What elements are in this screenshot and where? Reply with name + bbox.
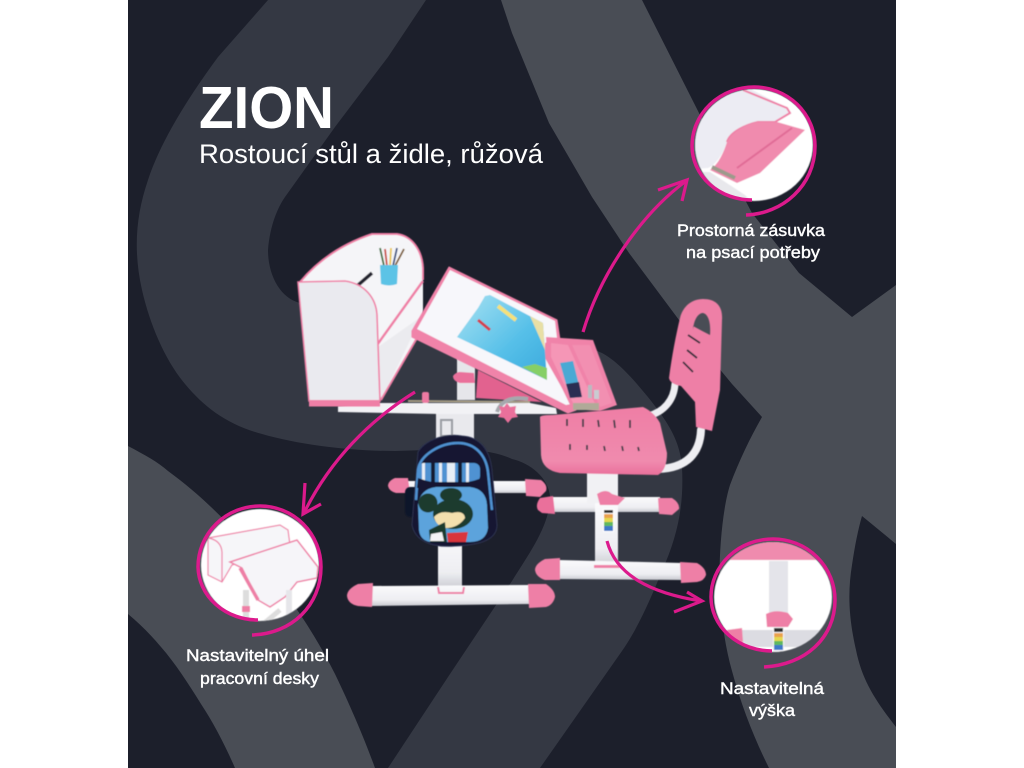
arrow: to height detail <box>607 541 702 612</box>
chair lower post <box>595 503 618 568</box>
chair upper post <box>587 472 618 504</box>
tilt arc <box>497 398 528 412</box>
shelf slot <box>357 273 372 286</box>
circle: drawer detail <box>694 88 814 202</box>
backpack hook <box>441 420 452 436</box>
label: drawer: na psací potřeby <box>686 243 821 262</box>
chair <box>535 299 722 583</box>
backrest slots <box>683 335 700 372</box>
pen drawer <box>546 337 617 411</box>
lower pole <box>436 410 474 450</box>
desk top <box>412 267 617 413</box>
label: height: výška <box>749 701 796 720</box>
subtitle: Rostoucí stůl a židle, růžová <box>199 139 544 169</box>
backpack <box>405 420 497 546</box>
back foot <box>388 478 546 497</box>
infographic <box>128 0 896 768</box>
desk beam <box>338 403 557 414</box>
background panel <box>128 0 896 768</box>
label: tilt: Nastavitelný úhel <box>186 646 329 665</box>
chair collar <box>597 491 625 505</box>
upper pole <box>457 358 475 400</box>
seat slots <box>567 419 639 451</box>
arrow: to drawer detail <box>583 180 687 332</box>
striped pocket <box>418 463 480 482</box>
circle: height detail <box>713 541 833 653</box>
side pocket <box>405 487 419 517</box>
pencil cup <box>380 248 404 286</box>
ring: height circle <box>711 539 835 667</box>
chair seat <box>540 407 667 475</box>
label: tilt <box>186 646 329 688</box>
front foot <box>347 583 555 608</box>
ring: tilt circle <box>198 506 321 635</box>
label: drawer <box>677 221 826 262</box>
title: ZION <box>199 75 334 141</box>
front pocket with character <box>418 487 488 542</box>
lower compartment <box>378 316 422 400</box>
arrow: to tilt detail <box>303 392 415 514</box>
hutch shelf <box>298 234 423 406</box>
chair rear foot <box>537 496 679 515</box>
label: tilt: pracovní desky <box>200 669 320 688</box>
label: height <box>720 679 825 720</box>
under-desk tray <box>476 370 542 402</box>
adjustment pin <box>422 392 429 403</box>
chair front foot <box>535 558 706 583</box>
desk base <box>338 358 557 608</box>
label: height: Nastavitelná <box>720 679 825 698</box>
circle: desk tilt detail <box>201 509 319 625</box>
height scale label <box>603 509 614 532</box>
open book <box>457 295 547 380</box>
hutch side panel <box>298 281 380 401</box>
ring: drawer circle <box>692 87 815 215</box>
label: drawer: Prostorná zásuvka <box>677 221 826 240</box>
chair metal supports <box>648 384 701 469</box>
star knob <box>498 403 518 423</box>
chair backrest <box>669 299 722 431</box>
pole collar <box>453 372 475 383</box>
pocket flap <box>417 478 484 488</box>
